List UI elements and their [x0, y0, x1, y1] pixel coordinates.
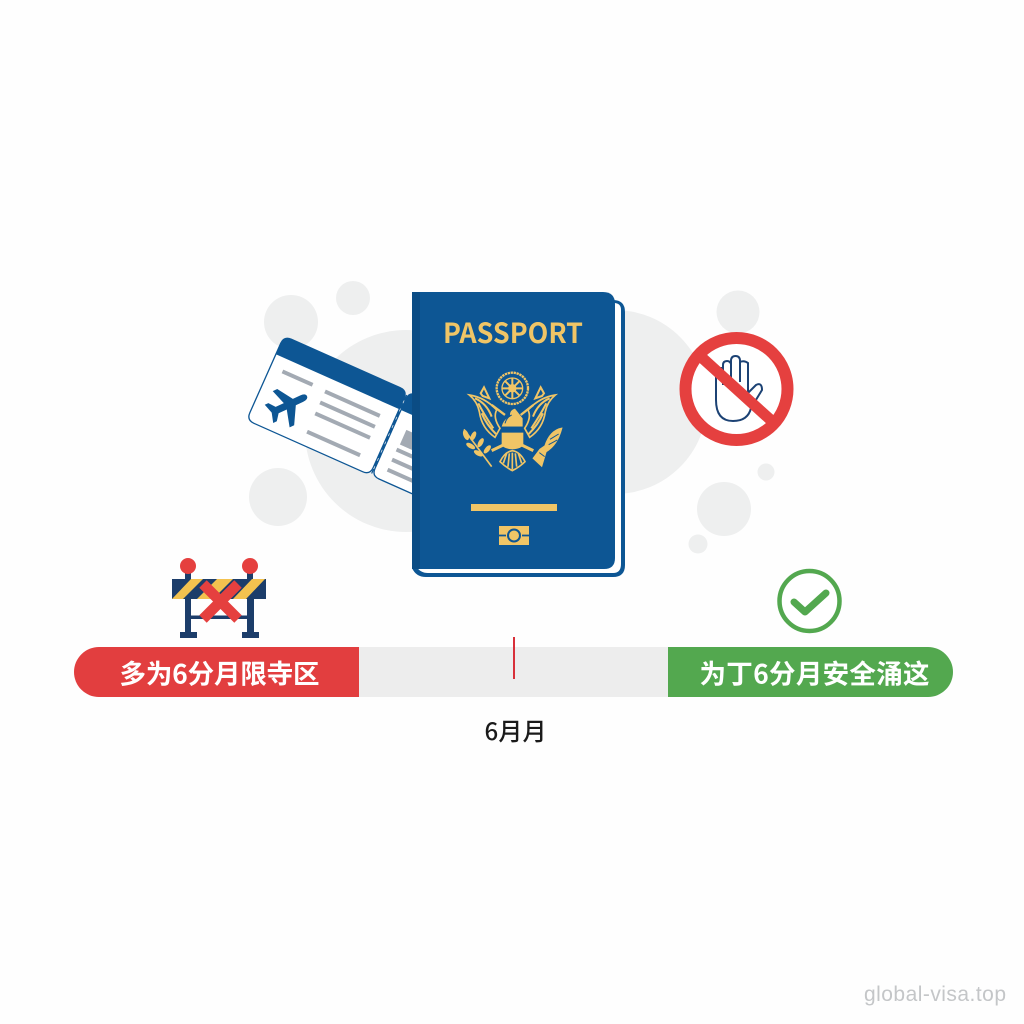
watermark: global-visa.top [864, 983, 1006, 1006]
gold bar [471, 504, 557, 511]
lamps [180, 558, 258, 580]
icon: green check [780, 571, 840, 631]
passport pages [416, 303, 621, 573]
eagle emblem [462, 373, 562, 471]
icon: stop hand prohibition [686, 338, 788, 440]
background bubbles [249, 281, 774, 554]
red cross [203, 584, 238, 619]
red segment label: 多为6分月限寺区 [120, 652, 320, 692]
passport [412, 292, 625, 577]
striped beam [172, 579, 266, 599]
green segment [668, 647, 953, 697]
marker label: 6月月 [484, 712, 546, 747]
biometric chip symbol [499, 526, 529, 545]
icon: airplane [261, 379, 316, 433]
passport back cover [412, 300, 625, 577]
hand outline [716, 356, 762, 421]
passport spine shade [412, 292, 420, 569]
green segment label: 为丁6分月安全涌这 [700, 652, 930, 692]
passport title: PASSPORT [443, 311, 583, 351]
timeline bar [74, 647, 953, 697]
icon: boarding pass [247, 336, 531, 530]
prohibition slash [699, 355, 774, 423]
red segment [74, 647, 359, 697]
icon: road barrier with cross [172, 558, 266, 638]
grey middle segment [359, 647, 668, 697]
passport front cover [412, 292, 615, 569]
six month marker [513, 637, 515, 679]
barrier frame [180, 598, 259, 638]
